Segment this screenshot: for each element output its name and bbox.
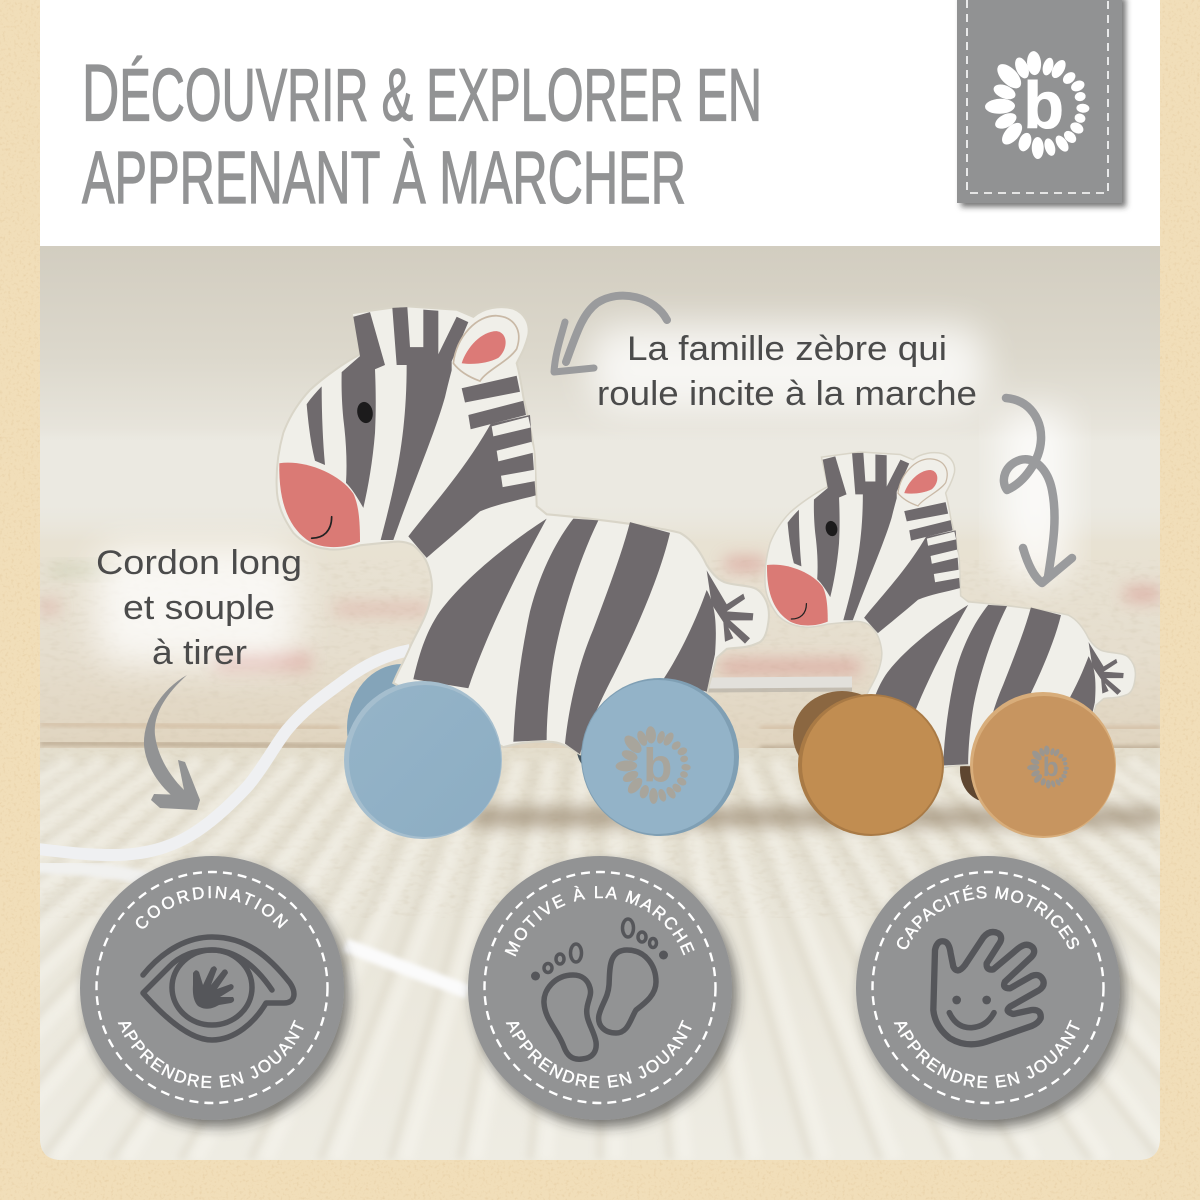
callout: cord: Cordon long [96,544,302,582]
icon: brand logo: b [1024,68,1064,142]
callout: family [597,330,977,413]
callout: cord [96,544,302,672]
badge: motive a la marche: MOTIVE À LA MARCHE [504,886,695,956]
back wheels [347,664,1016,802]
icon: brand logo [985,51,1090,159]
big zebra [277,306,769,754]
badge: coordination: APPRENDRE EN JOUANT [118,1020,304,1088]
badge: capacites motrices: CAPACITÉS MOTRICES [896,884,1080,950]
badge: coordination: COORDINATION [136,886,288,929]
badge: motive a la marche [464,854,746,1136]
arrow: to small zebra [1004,398,1072,583]
callout: family: roule incite à la marche [597,375,977,413]
big zebra front wheel [344,681,502,839]
icon: wheel logo: b [643,740,672,793]
title [82,48,762,219]
badge: coordination [76,854,358,1136]
arrow: to big zebra [554,296,667,372]
badge: capacites motrices [852,854,1134,1136]
brand tag [957,0,1122,203]
icon: small wheel logo: b [1043,752,1059,782]
pull cord [30,650,852,992]
photo panel [0,246,1200,1160]
arrow: to cord [144,675,200,810]
callout: cord: à tirer [152,634,247,672]
header panel [40,0,1160,246]
callout: family: La famille zèbre qui [627,330,947,368]
icon: smiling hand [933,932,1044,1044]
icon: wheel logo [615,726,691,804]
big zebra rear wheel [581,678,739,836]
icon: small wheel logo [1027,745,1069,789]
small zebra front wheel [798,694,944,836]
icon: eye with hand [143,937,294,1040]
callout: cord: et souple [123,589,275,627]
small zebra rear wheel [970,692,1116,838]
title: DÉCOUVRIR & EXPLORER EN [82,48,762,138]
small zebra [765,452,1135,774]
badge: motive a la marche: APPRENDRE EN JOUANT [506,1020,692,1088]
title: APPRENANT À MARCHER [82,136,686,219]
icon: footprints [531,919,668,1059]
text glow [95,325,1070,665]
badge: capacites motrices: APPRENDRE EN JOUANT [894,1020,1080,1088]
